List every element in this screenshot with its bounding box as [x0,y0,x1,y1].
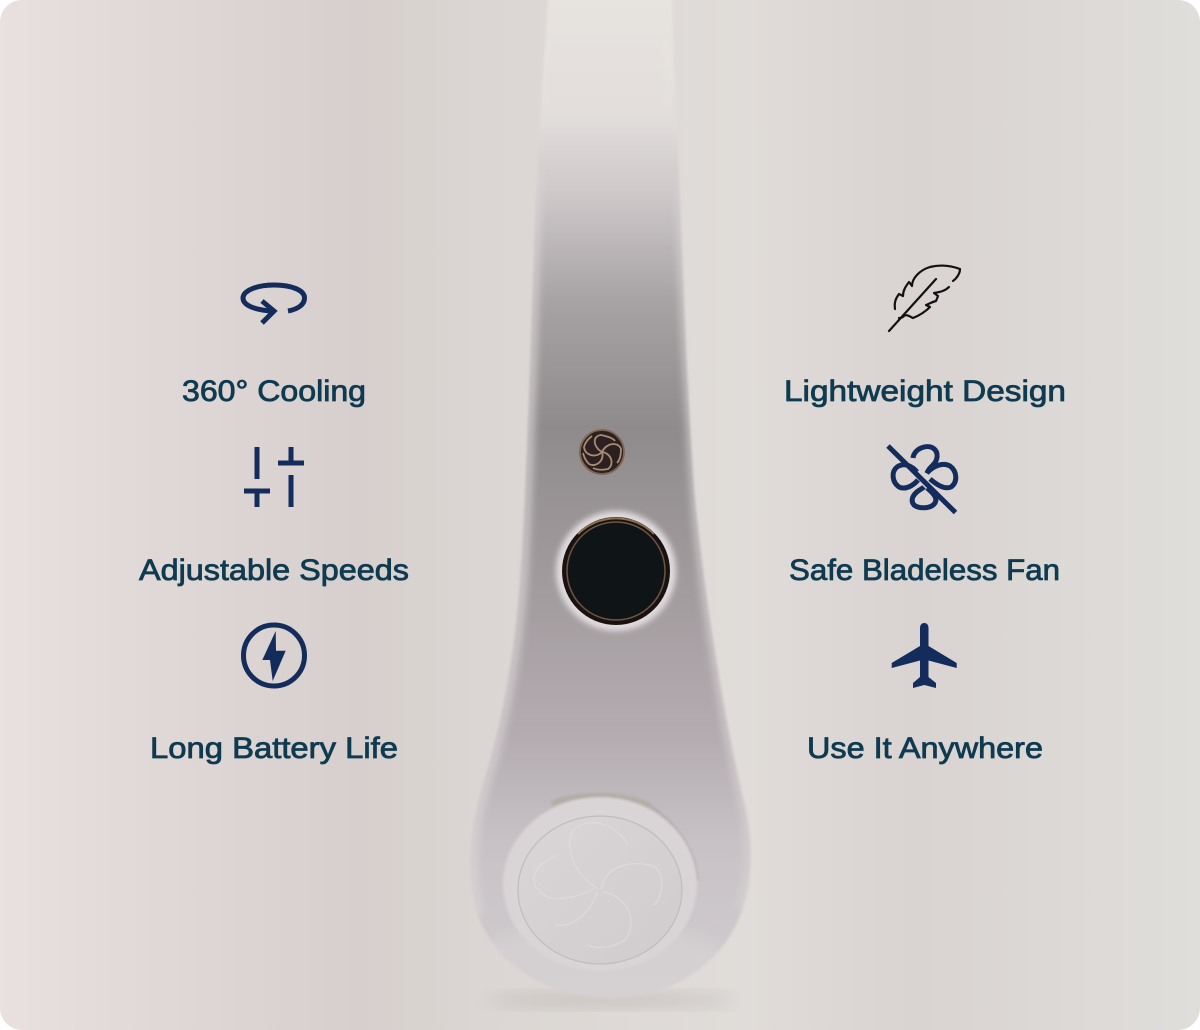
floor shadow [485,994,735,1006]
feature: adjustable speeds [139,447,409,587]
icon: lightning bolt in circle [244,625,304,686]
feature: lightweight design [784,266,1066,408]
solar panel sensor [556,511,676,631]
label: Safe Bladeless Fan [789,554,1060,587]
feature: 360 cooling [182,285,366,408]
icon: feather [889,266,960,331]
fan button [503,796,697,971]
device body [472,0,750,996]
label: Adjustable Speeds [139,554,409,587]
label: 360° Cooling [182,375,366,408]
panel: neck fan product [472,0,750,996]
label: Use It Anywhere [807,732,1043,765]
feature: use it anywhere [807,623,1043,765]
icon: airplane [892,623,957,688]
feature: safe bladeless fan [789,446,1060,587]
icon: embossed fan logo [580,430,624,474]
icon: rotation arrow [243,285,304,323]
label: Long Battery Life [150,732,398,765]
icon: crossed out fan [888,446,956,512]
feature: long battery life [150,625,398,765]
icon: sliders [244,447,304,507]
label: Lightweight Design [784,375,1066,408]
